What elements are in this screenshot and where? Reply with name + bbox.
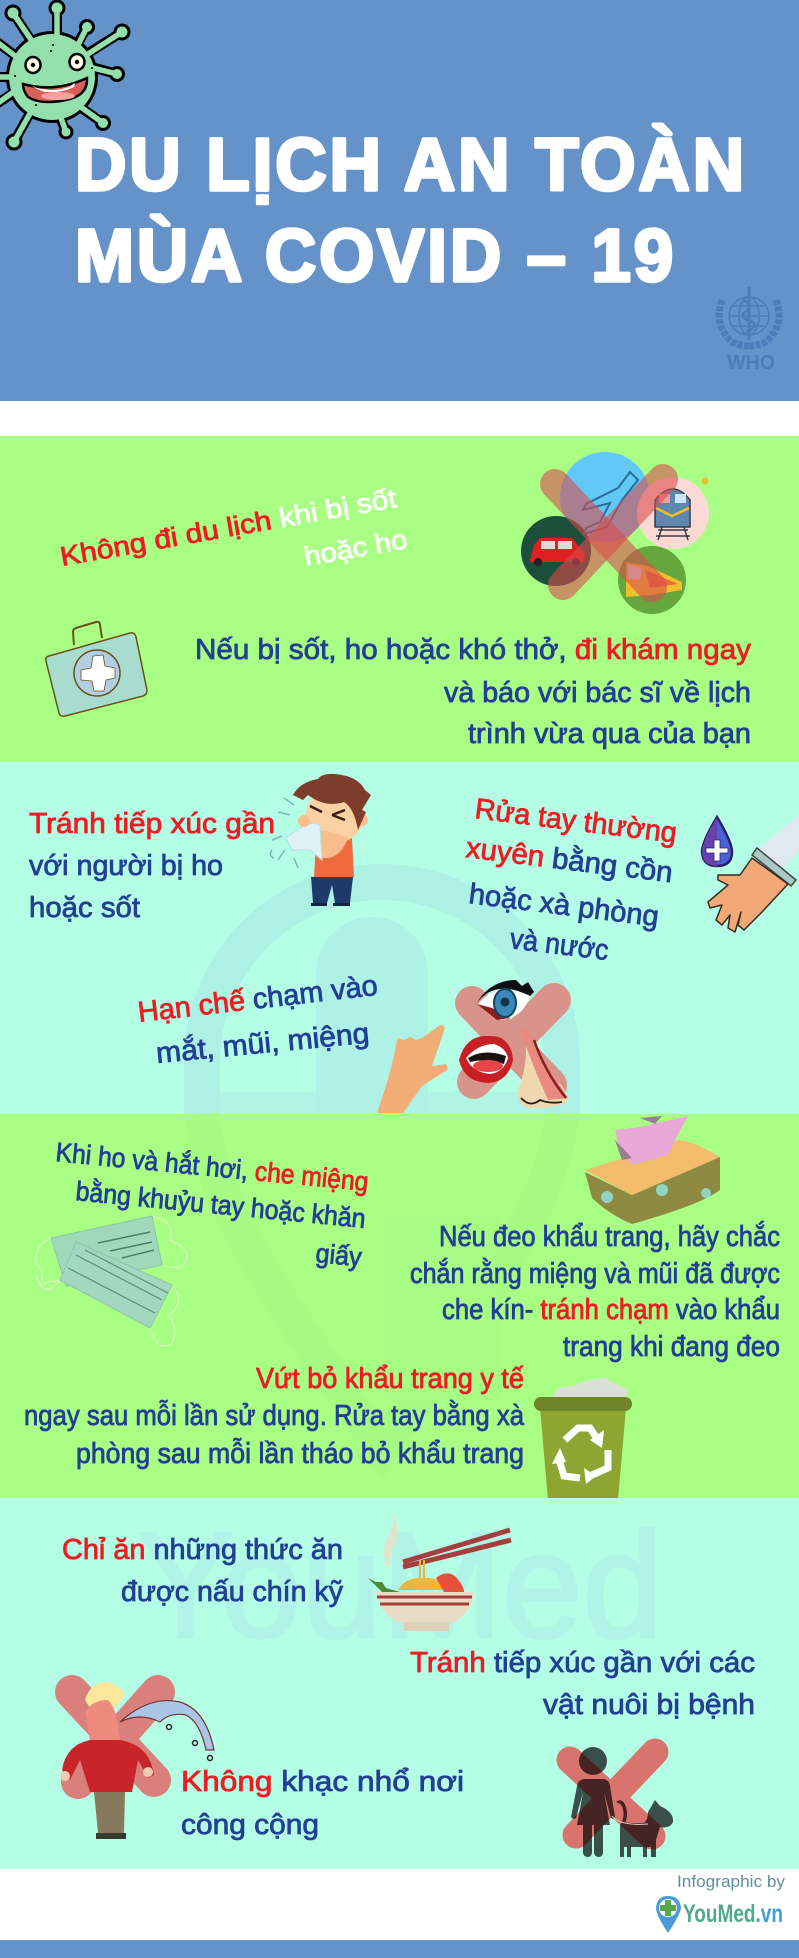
text: no spitting: công cộng (181, 1809, 319, 1841)
text: limit touching face: mắt, mũi, miệng (155, 1017, 371, 1070)
icon: sneezing boy (270, 774, 371, 906)
text: eat cooked food: được nấu chín kỹ (121, 1576, 343, 1608)
text: limit touching face (136, 970, 379, 1070)
text: limit touching face: Hạn chế chạm vào (136, 970, 379, 1029)
text: see a doctor: và báo với bác sĩ về lịch (444, 677, 751, 709)
icon: noodle bowl (368, 1513, 511, 1631)
text: wearing a mask: trang khi đang đeo (563, 1331, 780, 1363)
eye (476, 980, 534, 1020)
text: cover your mouth: giấy (314, 1238, 364, 1272)
text: dispose of mask (24, 1363, 525, 1470)
train (655, 489, 690, 527)
icon: spitting man with cross (60, 1682, 214, 1839)
text: avoid sick animals: Tránh tiếp xúc gần với các (410, 1647, 755, 1679)
panel: header (0, 0, 799, 401)
text: see a doctor: Nếu bị sốt, ho hoặc khó thở, đi khám ngay (195, 634, 751, 666)
logo: YouMed (656, 1896, 783, 1933)
icon: tissue box (585, 1116, 720, 1224)
high speed train (626, 562, 682, 597)
text: cover your mouth: Khi ho và hắt hơi, che miệng (54, 1136, 370, 1197)
text: wash hands (464, 793, 679, 967)
crossed bandage (555, 479, 663, 587)
text: avoid sick animals (410, 1647, 755, 1721)
text: do not travel when sick: Không đi du lịch khi bị sốt (58, 483, 399, 572)
text: avoid close contact: Tránh tiếp xúc gần (29, 808, 275, 840)
icon: smiling virus mascot (0, 0, 130, 150)
car (530, 538, 585, 562)
icon: washing hand (708, 815, 799, 932)
text: infographic by: Infographic by (677, 1872, 785, 1891)
text: no spitting: Không khạc nhổ nơi (181, 1766, 464, 1798)
text: see a doctor: trình vừa qua của bạn (468, 718, 751, 750)
icon: WHO logo (719, 287, 779, 374)
icon: sanitizer drop (702, 817, 732, 866)
title: DU LỊCH AN TOÀN (75, 123, 747, 206)
text: cover your mouth (54, 1136, 370, 1272)
text: dispose of mask: ngay sau mỗi lần sử dụng. Rửa tay bằng xà (24, 1399, 525, 1432)
text: wearing a mask: che kín- tránh chạm vào khẩu (442, 1294, 780, 1326)
title (75, 123, 747, 297)
panel: hygiene (0, 762, 799, 1114)
panel: masks (0, 1114, 799, 1500)
icon: recycling bin (534, 1378, 632, 1500)
text: wash hands: xuyên bằng cồn (464, 831, 675, 889)
icon: vehicles with crossed bandage (521, 452, 709, 614)
text: cover your mouth: bằng khuỷu tay hoặc khăn (74, 1175, 367, 1234)
text: see a doctor (195, 634, 751, 750)
text: avoid close contact: với người bị ho (29, 850, 223, 882)
text: avoid sick animals: vật nuôi bị bệnh (543, 1689, 755, 1721)
logo: YouMed: YouMed.vn (683, 1900, 783, 1928)
footer bar (0, 1940, 799, 1958)
text: wearing a mask (410, 1220, 780, 1363)
icon: first aid kit (46, 622, 147, 716)
label: WHO: WHO (727, 352, 775, 374)
text: dispose of mask: Vứt bỏ khẩu trang y tế (256, 1363, 524, 1395)
panel: footer credit (0, 1869, 799, 1940)
watermark: pin logo (202, 882, 562, 1114)
panel: food and animals (0, 1498, 799, 1869)
icon: hand touching face with cross (377, 980, 568, 1113)
text: wash hands: hoặc xà phòng (467, 878, 661, 933)
text: eat cooked food: Chỉ ăn những thức ăn (62, 1534, 343, 1566)
title: MÙA COVID – 19 (75, 214, 676, 297)
watermark: YouMed: YouMed (138, 1501, 663, 1669)
text: eat cooked food (62, 1534, 343, 1608)
text: wash hands: Rửa tay thường (473, 793, 679, 850)
text: dispose of mask: phòng sau mỗi lần tháo bỏ khẩu trang (76, 1437, 524, 1470)
nose (518, 1028, 568, 1108)
plane (583, 472, 638, 534)
icon: surgical masks (36, 1216, 187, 1346)
text: avoid close contact: hoặc sốt (29, 892, 140, 924)
panel: fever and travel (0, 436, 799, 762)
text: avoid close contact (29, 808, 275, 924)
watermark: pin logo lower half (202, 1114, 562, 1450)
text: no spitting (181, 1766, 464, 1841)
mouth (459, 1036, 513, 1083)
icon: person and dog with cross (570, 1747, 673, 1857)
text: do not travel when sick: hoặc ho (302, 524, 409, 572)
text: wash hands: và nước (508, 923, 610, 967)
